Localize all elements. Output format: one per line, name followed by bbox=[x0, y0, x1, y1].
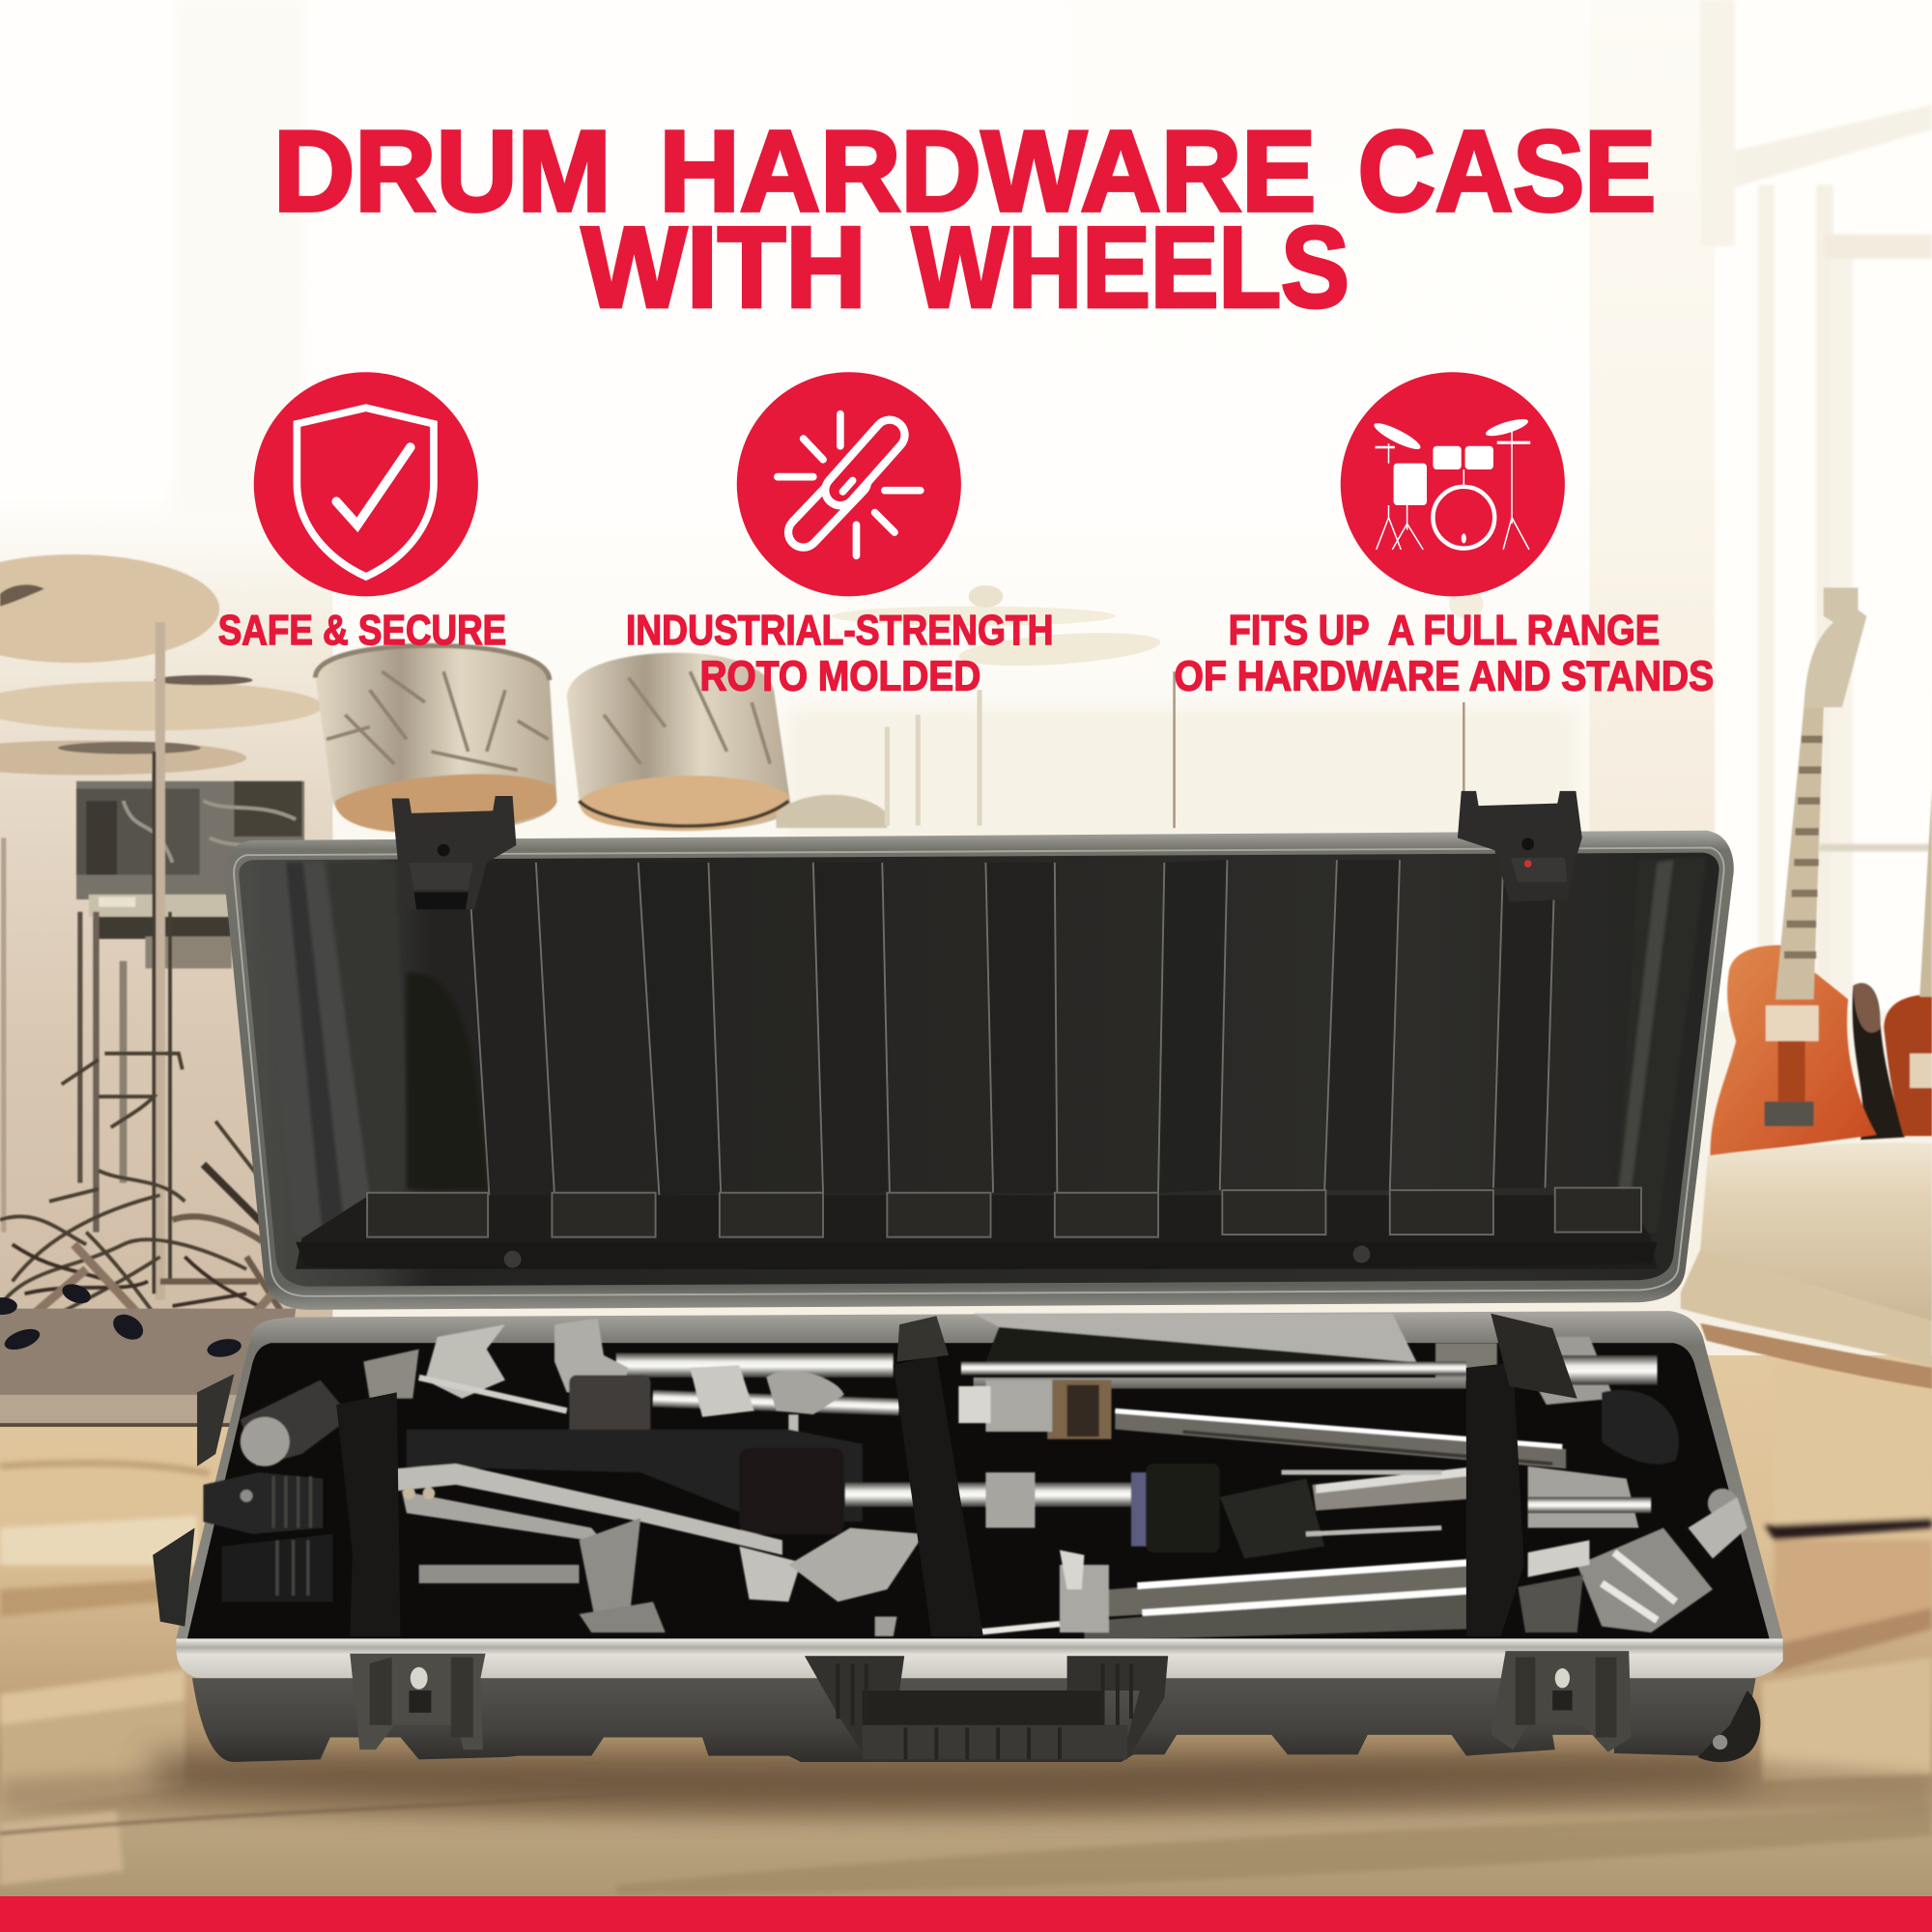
right end hardware bbox=[1509, 1337, 1614, 1405]
middle dark pieces bbox=[407, 1430, 863, 1521]
bottom red bar bbox=[0, 1896, 1932, 1932]
right latch bbox=[1458, 791, 1582, 902]
title: WITH bbox=[582, 205, 867, 332]
feature: safe and secure bbox=[218, 372, 506, 654]
label: industrial strength roto molded: INDUSTRIAL-STRENGTH bbox=[626, 608, 1054, 654]
upper tubes bbox=[616, 1353, 894, 1378]
background: rug bbox=[0, 1309, 296, 1427]
silver rim band bbox=[176, 1638, 1783, 1678]
rear rim bbox=[176, 1311, 1783, 1658]
third cymbal bbox=[0, 741, 246, 775]
open case lid bbox=[224, 791, 1734, 1310]
icon: drum kit bbox=[1341, 372, 1565, 596]
background: hammered drum kit bbox=[0, 554, 887, 1343]
feature: industrial strength bbox=[626, 372, 1054, 699]
background: faint rear cymbals and stands bbox=[832, 585, 1484, 828]
background: guitars bbox=[1710, 587, 1932, 1157]
icon: breaking chain link bbox=[737, 372, 961, 596]
headstock bbox=[1804, 587, 1866, 707]
lid left and right moulded walls bbox=[259, 858, 1707, 1238]
background: studio room bbox=[0, 0, 1932, 1439]
title bbox=[273, 108, 1656, 332]
open case base bbox=[153, 1311, 1783, 1762]
dark guitar bbox=[1853, 983, 1905, 1140]
black rubber feet bbox=[241, 1380, 352, 1466]
back panel bbox=[974, 1314, 1417, 1363]
lid interior bbox=[239, 853, 1719, 1287]
bridge bbox=[1766, 1006, 1819, 1041]
large lower chrome tubes bbox=[1109, 1562, 1471, 1616]
label: fits a full range of hardware and stands: FITS UP A FULL RANGE bbox=[1229, 608, 1660, 654]
title: CASE bbox=[1358, 108, 1656, 236]
right-hand straps of metal bbox=[1312, 1466, 1479, 1511]
lid ribs bbox=[469, 860, 1555, 1198]
title: DRUM bbox=[273, 108, 611, 236]
snare silhouette bbox=[777, 795, 887, 828]
background: window and columns bbox=[1700, 0, 1932, 1010]
right clamp bbox=[1491, 1651, 1632, 1752]
left latch bbox=[392, 796, 516, 909]
label: safe and secure: SAFE & SECURE bbox=[218, 608, 506, 654]
background: stand tips on rug bbox=[0, 1281, 242, 1359]
tray interior bbox=[187, 1343, 1770, 1638]
wheel bbox=[1698, 1690, 1760, 1762]
bass pedal chrome bbox=[394, 1463, 782, 1555]
rack tom left bbox=[316, 645, 557, 833]
label: fits a full range of hardware and stands bbox=[1175, 608, 1714, 699]
joints at upper left bbox=[425, 1324, 505, 1399]
icon: shield with check bbox=[254, 372, 478, 596]
label: industrial strength roto molded: ROTO MOLDED bbox=[699, 653, 980, 699]
stand feet bbox=[0, 1054, 321, 1331]
background: wooden floor bbox=[0, 1355, 1932, 1897]
orange guitar neck bbox=[1776, 707, 1824, 999]
feature: fits a full range bbox=[1175, 372, 1714, 699]
chrome hardware bbox=[203, 1314, 1747, 1641]
orange guitar body bbox=[1710, 945, 1877, 1157]
title: WHEELS bbox=[912, 205, 1350, 332]
lid bottom panels bbox=[296, 1195, 1658, 1269]
case lower body bbox=[192, 1678, 1756, 1762]
third guitar bbox=[1884, 994, 1932, 1136]
rack tom right bbox=[567, 653, 791, 831]
side handle bbox=[153, 1528, 195, 1627]
title: HARDWARE bbox=[659, 108, 1316, 236]
carry handle bbox=[805, 1656, 1168, 1762]
background: sofa bbox=[1681, 1143, 1932, 1389]
lid outer shell bbox=[224, 831, 1734, 1310]
straps bbox=[336, 1314, 1577, 1636]
label: industrial strength roto molded bbox=[626, 608, 1054, 699]
second cymbal bbox=[0, 681, 323, 730]
stands bbox=[4, 622, 170, 1300]
left clamp bbox=[350, 1654, 486, 1749]
label: fits a full range of hardware and stands: OF HARDWARE AND STANDS bbox=[1175, 653, 1714, 699]
big cymbal bbox=[0, 554, 219, 663]
center chrome tube bbox=[845, 1482, 1131, 1507]
